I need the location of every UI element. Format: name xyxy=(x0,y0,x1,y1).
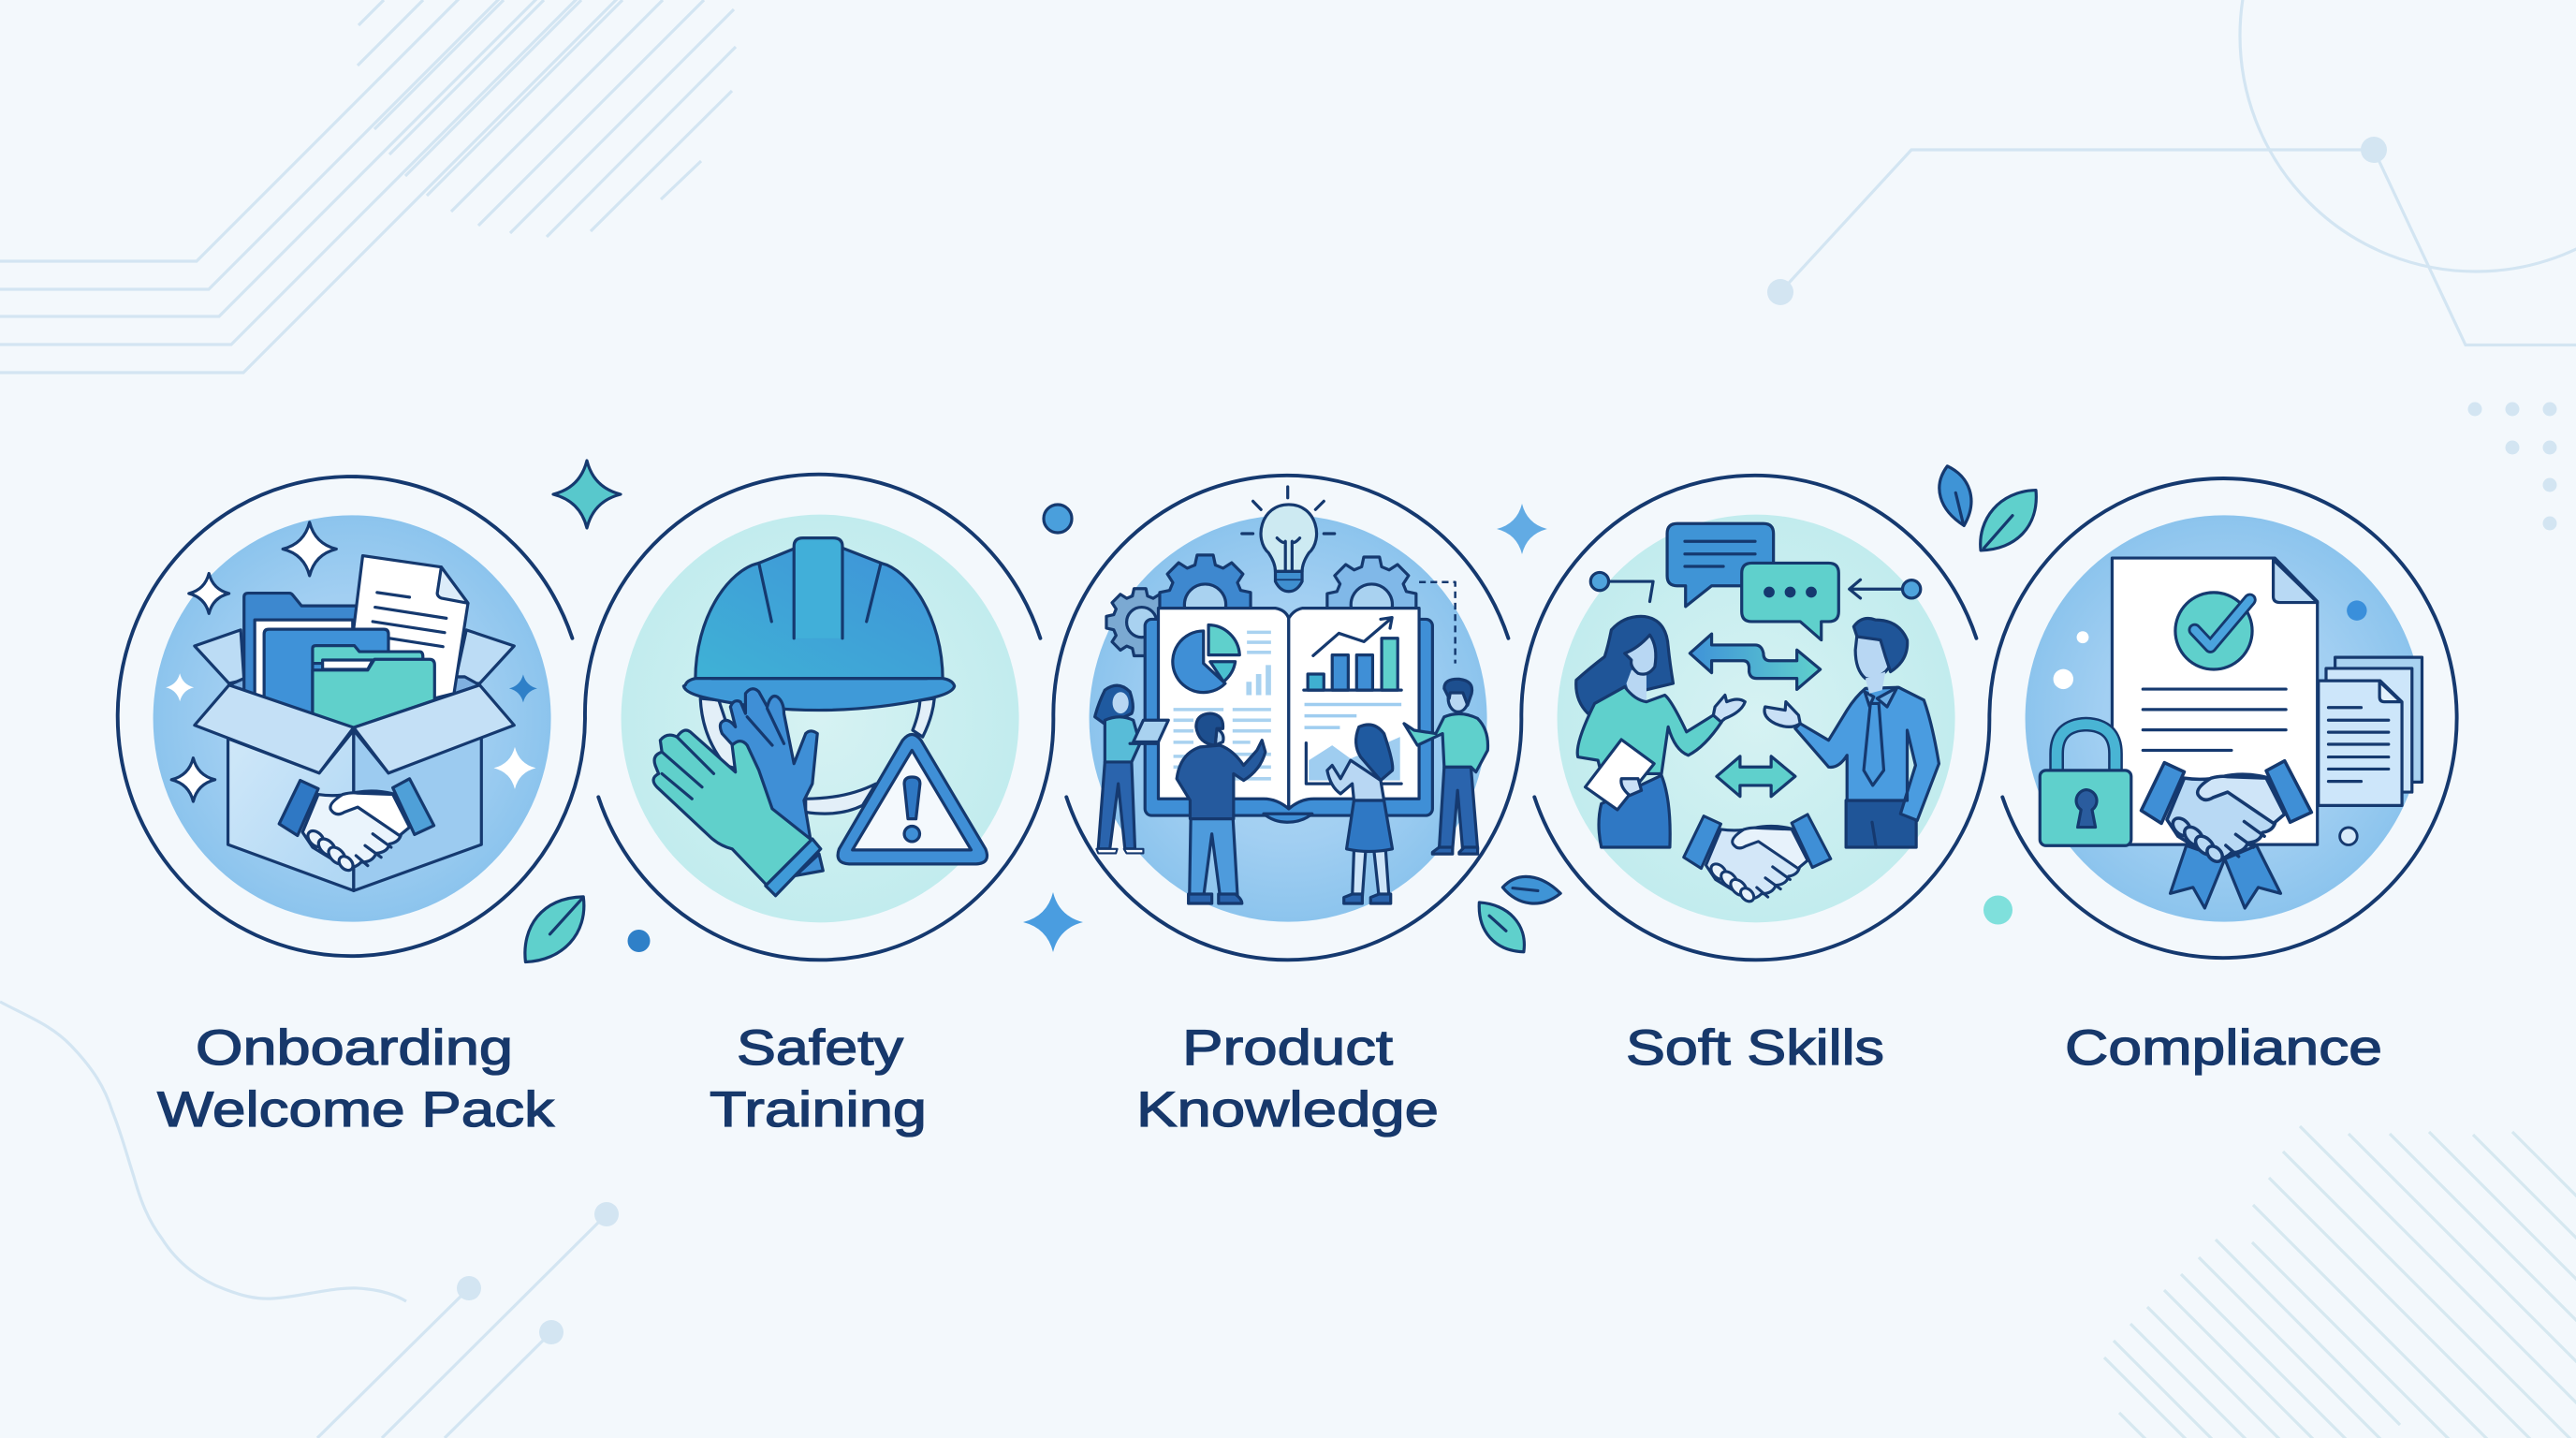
bar chart xyxy=(1304,618,1401,690)
label: onboarding welcome pack: Onboarding xyxy=(196,1020,513,1076)
person gesturing xyxy=(1404,679,1488,854)
pie chart xyxy=(1173,624,1239,693)
disk xyxy=(1558,515,1955,922)
icon: warning triangle xyxy=(838,734,988,864)
icon: open book xyxy=(1145,609,1432,822)
disk xyxy=(1090,515,1487,922)
icon: open box with folders xyxy=(195,556,514,890)
label: product knowledge xyxy=(1136,1020,1439,1137)
icon: blue dot xyxy=(627,930,650,952)
background pattern: right dot grid xyxy=(2467,403,2557,530)
background pattern: top-right network lines xyxy=(1767,0,2576,345)
label: product knowledge: Product xyxy=(1182,1020,1393,1076)
floating accents between circles xyxy=(525,461,2036,961)
icon: teal leaf upper xyxy=(1981,491,2036,550)
icon: gears xyxy=(1106,555,1416,656)
left page text lines xyxy=(1174,632,1271,779)
panel: product knowledge xyxy=(1090,487,1488,922)
panel: onboarding welcome pack xyxy=(154,515,551,922)
icon: blue star upper xyxy=(1497,504,1547,554)
disk xyxy=(154,515,551,922)
person pointing xyxy=(1177,713,1266,903)
icon: teal star xyxy=(553,461,621,528)
icon: blue glove xyxy=(720,689,817,841)
arrow: wavy two-way xyxy=(1690,634,1821,689)
icon: speech bubble with lines xyxy=(1667,523,1774,607)
icon: connector right arrow xyxy=(1850,580,1921,598)
icon: outlined blue dot xyxy=(1044,505,1072,533)
right page lines and area chart xyxy=(1305,704,1401,784)
person: man xyxy=(1764,619,1939,847)
icon: teal leaf xyxy=(525,897,584,961)
icon: teal glove xyxy=(653,730,823,896)
icon: connector left xyxy=(1590,572,1653,601)
label: safety training: Safety xyxy=(737,1020,904,1076)
person in skirt xyxy=(1327,725,1393,903)
icon: certificate document xyxy=(2112,558,2318,844)
connected ring outlines xyxy=(118,475,2457,960)
label: onboarding welcome pack: Welcome Pack xyxy=(157,1082,555,1137)
icon: check badge xyxy=(2175,593,2252,669)
panel: soft skills xyxy=(1558,515,1955,922)
label: onboarding welcome pack xyxy=(157,1020,555,1137)
person with laptop xyxy=(1095,685,1168,853)
disk xyxy=(622,515,1019,922)
label: safety training xyxy=(710,1020,927,1137)
background pattern: top-left circuit lines xyxy=(0,0,736,373)
icon: blue star lower xyxy=(1023,892,1083,952)
icon: handshake xyxy=(1684,814,1831,904)
icon: padlock xyxy=(2040,725,2131,845)
icon: speech bubble with dots xyxy=(1742,563,1838,640)
icon: handshake xyxy=(2141,761,2311,864)
icon: handshake xyxy=(279,779,434,873)
label: product knowledge: Knowledge xyxy=(1136,1082,1439,1137)
icon: blue leaf upper xyxy=(1939,466,1971,525)
icon: ribbons xyxy=(2171,845,2280,908)
icon: paper stack xyxy=(2319,657,2422,805)
label: soft skills: Soft Skills xyxy=(1626,1020,1884,1076)
disk xyxy=(2026,515,2423,922)
icon: helmet harness xyxy=(700,698,934,814)
icon: teal leaf lower xyxy=(1479,902,1524,952)
icon: lightbulb xyxy=(1242,487,1335,592)
background pattern: bottom-left curve and nodes xyxy=(0,1002,619,1438)
panel: safety training xyxy=(622,515,1019,922)
icon: hard hat xyxy=(683,538,955,711)
icon: pale teal dot xyxy=(1983,895,2012,925)
label: compliance: Compliance xyxy=(2065,1020,2382,1076)
label: safety training: Training xyxy=(710,1082,927,1137)
background pattern: bottom-right hatching xyxy=(2104,1126,2576,1438)
arrow: two-way xyxy=(1717,756,1795,797)
dashed connector xyxy=(1419,582,1456,664)
person: woman xyxy=(1576,616,1745,847)
panel: compliance xyxy=(2026,515,2423,922)
sparkles xyxy=(166,522,537,801)
icon: blue leaf lower xyxy=(1502,876,1560,903)
decorative dots xyxy=(2054,600,2367,844)
